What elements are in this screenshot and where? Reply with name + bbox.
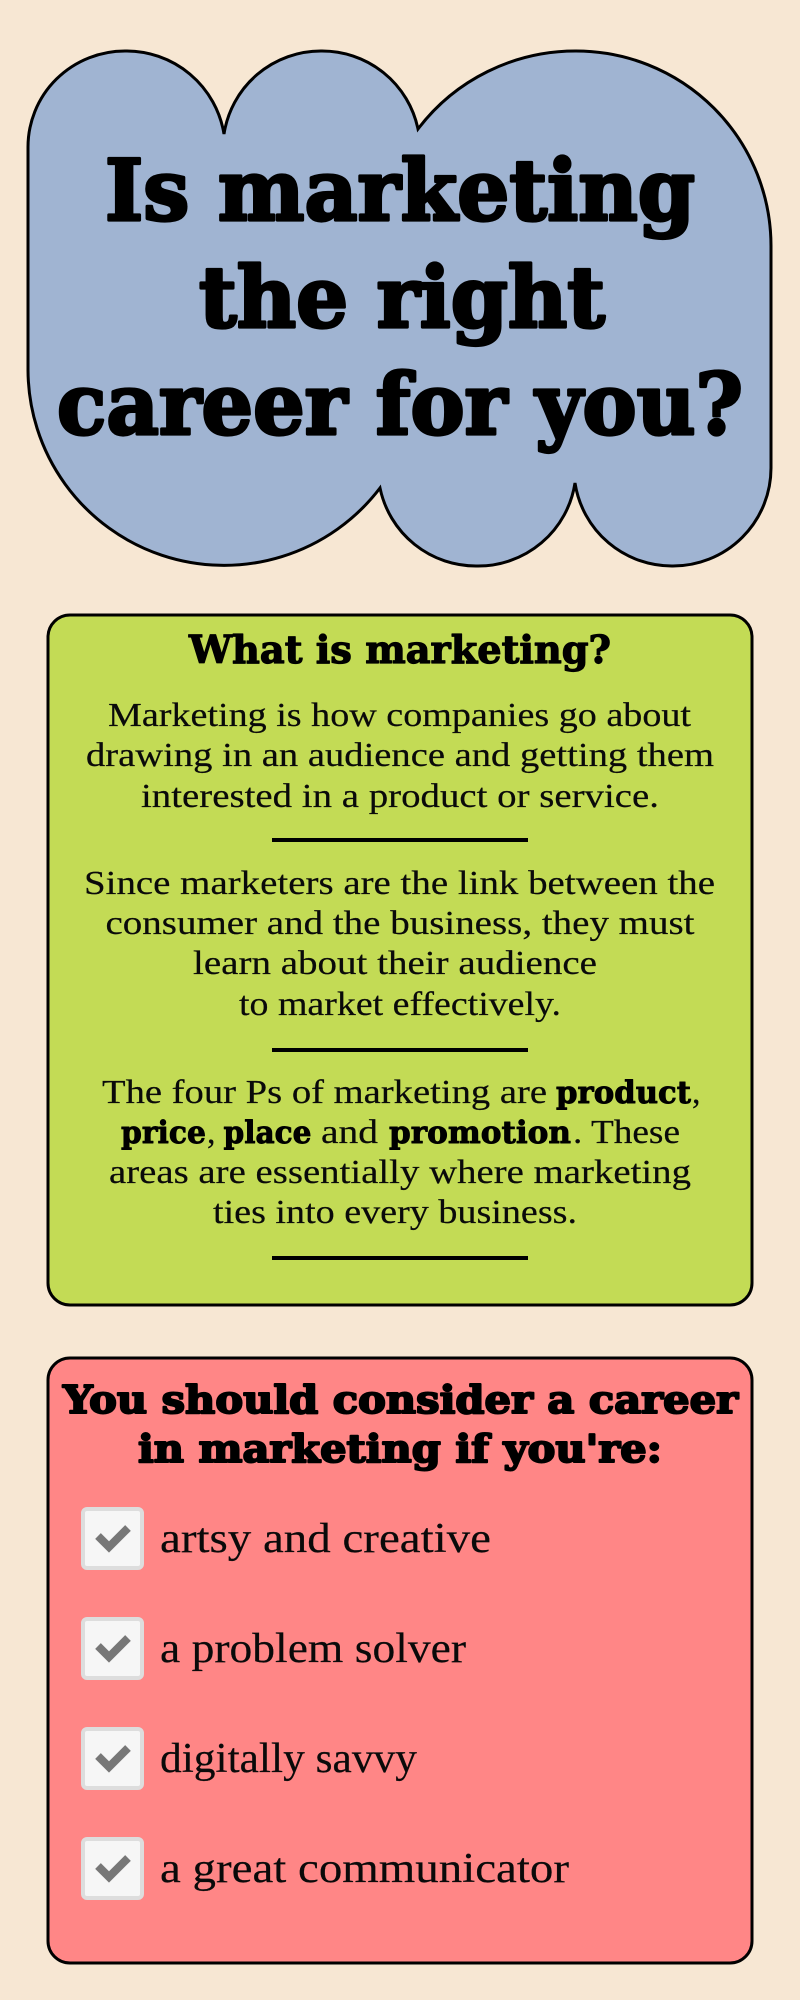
checklist item: artsy and creative <box>83 1509 491 1568</box>
paragraph: four Ps: , <box>692 1074 700 1111</box>
title: the right <box>199 248 605 347</box>
paragraph: definition: drawing in an audience and getting them <box>86 737 714 774</box>
paragraph: four Ps: . These <box>573 1114 680 1151</box>
heading: consider a career: in marketing if you're: <box>138 1426 662 1471</box>
heading: consider a career <box>62 1377 739 1471</box>
checklist item: a problem solver: a problem solver <box>160 1626 466 1672</box>
divider 3 <box>272 1256 528 1260</box>
paragraph: four Ps <box>102 1074 700 1231</box>
paragraph: four Ps: price <box>121 1115 206 1151</box>
paragraph: four Ps: The four Ps of marketing are <box>102 1074 547 1111</box>
paragraph: four Ps: areas are essentially where marketing <box>109 1154 691 1191</box>
heading: consider a career: You should consider a career <box>62 1377 739 1422</box>
paragraph: link between consumer and business: learn about their audience <box>193 945 597 982</box>
paragraph: four Ps: product <box>556 1075 692 1111</box>
paragraph: link between consumer and business: consumer and the business, they must <box>106 905 695 942</box>
divider 2 <box>272 1048 528 1052</box>
paragraph: four Ps: ties into every business. <box>213 1194 577 1231</box>
panel: you should consider a career <box>48 1358 752 1963</box>
panel background <box>48 615 752 1305</box>
title <box>57 141 743 454</box>
paragraph: link between consumer and business <box>84 865 715 1023</box>
checklist item: a great communicator <box>83 1839 569 1898</box>
paragraph: four Ps: place <box>224 1115 312 1151</box>
checklist item: a great communicator: a great communicator <box>160 1846 569 1892</box>
title: Is marketing <box>105 141 695 240</box>
paragraph: four Ps: and <box>321 1114 378 1151</box>
checklist item: digitally savvy: digitally savvy <box>160 1736 417 1782</box>
divider 1 <box>272 838 528 842</box>
paragraph: four Ps: , <box>207 1114 216 1151</box>
heading: what is marketing: What is marketing? <box>188 627 611 672</box>
paragraph: definition <box>86 697 714 815</box>
paragraph: four Ps: promotion <box>389 1115 571 1151</box>
checklist item: artsy and creative: artsy and creative <box>160 1516 491 1562</box>
cloud shape <box>28 51 771 566</box>
paragraph: link between consumer and business: Since marketers are the link between the <box>84 865 715 902</box>
paragraph: definition: Marketing is how companies go about <box>108 697 692 734</box>
title cloud panel <box>28 51 771 566</box>
title: career for you? <box>57 355 743 454</box>
panel background <box>48 1358 752 1963</box>
panel: what is marketing <box>48 615 752 1305</box>
paragraph: definition: interested in a product or service. <box>141 778 659 815</box>
checklist item: digitally savvy <box>83 1729 417 1788</box>
paragraph: link between consumer and business: to market effectively. <box>239 986 561 1023</box>
checklist item: a problem solver <box>83 1619 466 1678</box>
